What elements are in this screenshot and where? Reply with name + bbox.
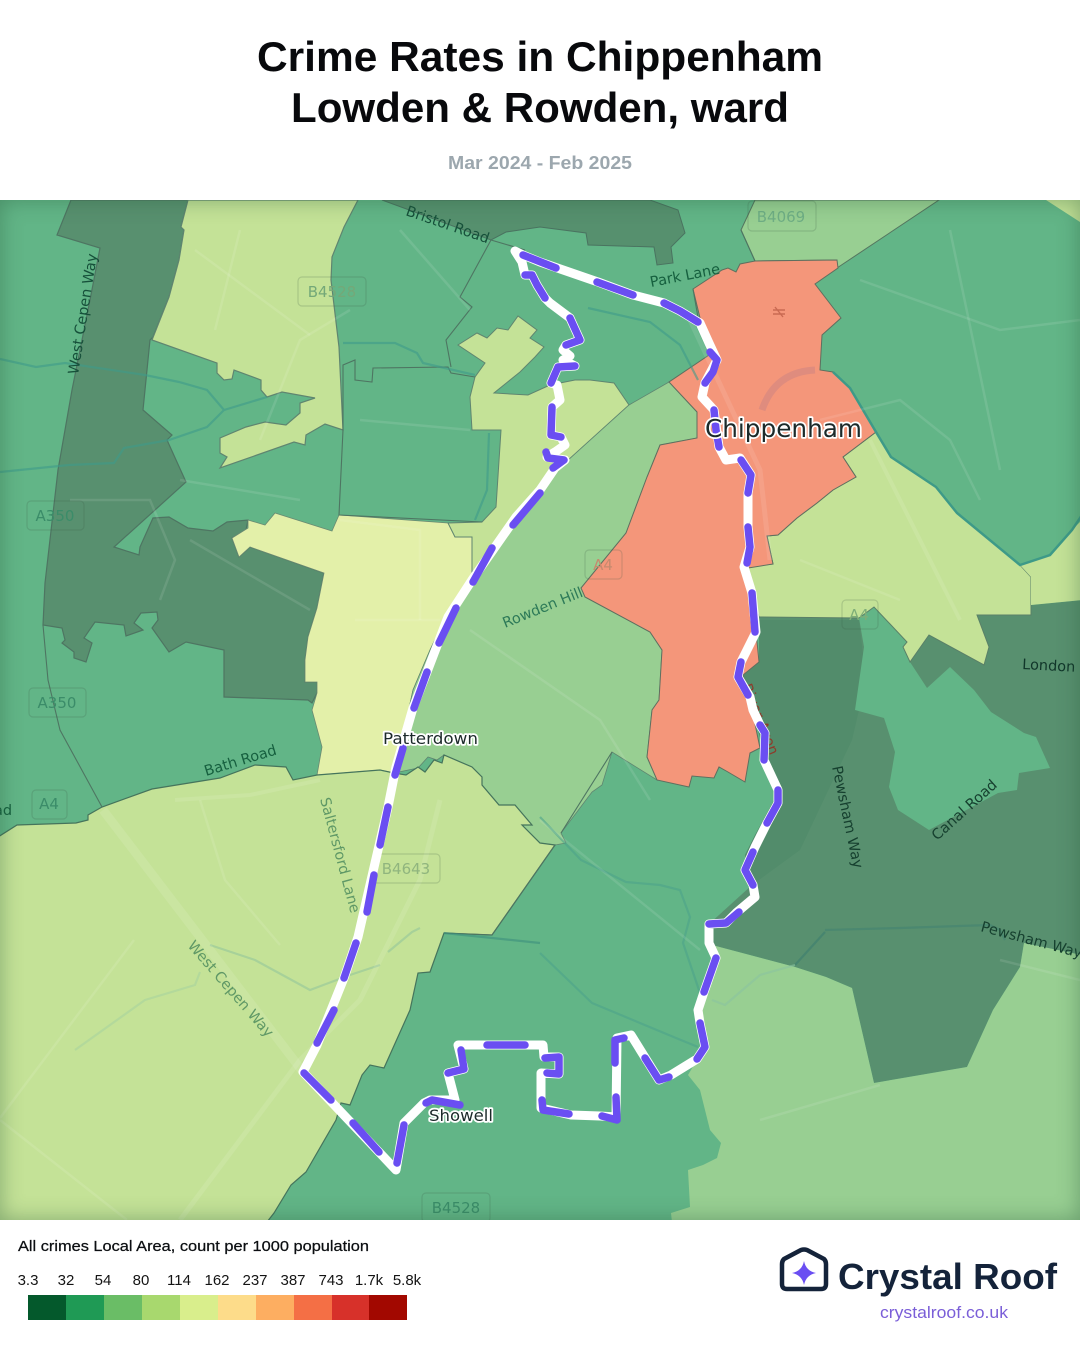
title: Crime Rates in Chippenham: [257, 33, 823, 80]
road shield: B4528 south: B4528: [432, 1199, 480, 1217]
legend value labels: 3.3: [18, 1272, 38, 1289]
road label: West Cepen Way north: West Cepen Way: [66, 252, 101, 376]
road shield: B4069: [748, 201, 816, 231]
legend value labels: 237: [242, 1272, 268, 1289]
road shield: A350 north: [27, 501, 84, 530]
road label: Bath Road: Bath Road: [202, 743, 279, 780]
title: Lowden & Rowden, ward: [291, 84, 789, 131]
area borders on medium green: [43, 230, 755, 935]
road label: London: London: [1022, 657, 1076, 676]
legend value labels: [18, 1272, 422, 1289]
legend value labels: 80: [133, 1272, 149, 1289]
road shield: B4069: B4069: [757, 208, 805, 226]
legend title: All crimes Local Area, count per 1000 population: [18, 1238, 369, 1255]
icon: house with star: [782, 1250, 826, 1289]
legend value labels: 114: [167, 1272, 191, 1289]
area: Canal Road medium green: [855, 607, 1050, 830]
road label: Park Lane: Park Lane: [649, 262, 722, 291]
area: north-west yellow-green: [152, 200, 358, 468]
road label: river text hidden beneath the ward boundary: River Avon: [738, 682, 781, 757]
road label: West Cepen Way south: West Cepen Way: [184, 938, 276, 1041]
area: north-east mid green: [741, 200, 939, 268]
road label: Rowden Hill: Rowden Hill: [501, 585, 585, 632]
place label: Chippenham: Chippenham: [705, 414, 862, 443]
area: east dark district: [708, 600, 1080, 1083]
area: Chippenham town centre salmon: [581, 260, 876, 787]
road shield: A4 centre: A4: [593, 556, 613, 574]
road shield: A4 east: A4: [849, 606, 869, 624]
road shield: A4 west: [32, 790, 67, 819]
road shield: A4 centre: [585, 550, 622, 579]
road shield: B4528 north: [298, 277, 366, 306]
road shield: A350 south: A350: [38, 694, 76, 712]
road shield: A4 west: A4: [39, 795, 59, 813]
area: north dark Bristol Road: [382, 200, 685, 265]
road shield: B4643: [373, 854, 440, 883]
ward boundary white line: [303, 251, 778, 1170]
area: south-east mid green: [671, 943, 1080, 1222]
road label: Canal Road: Canal Road: [929, 777, 1001, 844]
road shield: B4643: B4643: [382, 860, 430, 878]
road shield: B4528 north: B4528: [308, 283, 356, 301]
legend value labels: 5.8k: [393, 1272, 422, 1289]
area: east yellow-green: [743, 432, 1031, 665]
road shield: B4528 south: [422, 1193, 490, 1222]
legend: [18, 1238, 422, 1320]
logo url: crystalroof.co.uk: [880, 1304, 1009, 1322]
area: far-east yellow-green patch: [1020, 520, 1080, 605]
panel: choropleth map: [0, 200, 1080, 1222]
legend value labels: 387: [280, 1272, 306, 1289]
legend value labels: 32: [58, 1272, 74, 1289]
road shield: A350 south: [29, 688, 86, 717]
water courses: [0, 308, 1005, 1050]
road label: Saltersford Lane: Saltersford Lane: [316, 796, 362, 915]
place label: Patterdown: Patterdown: [383, 729, 478, 748]
road label: Bristol Road: Bristol Road: [404, 204, 491, 247]
river along the east boundary: [833, 372, 1080, 565]
legend value labels: 162: [204, 1272, 230, 1289]
subtitle: date range: Mar 2024 - Feb 2025: [448, 153, 632, 173]
logo: Crystal Roof: [782, 1250, 1058, 1322]
area: top-right corner: [1046, 200, 1080, 222]
logo wordmark: Crystal Roof: [838, 1256, 1058, 1297]
legend value labels: 743: [318, 1272, 344, 1289]
ward boundary purple dashes: [304, 255, 778, 1163]
river arc in town centre: [762, 370, 815, 410]
road label: Pewsham Way north: Pewsham Way: [828, 765, 865, 870]
map base area: medium green: [0, 200, 1080, 1220]
road shield: A4 east: [842, 600, 878, 629]
title: [257, 33, 823, 131]
place label: Showell: Showell: [429, 1106, 493, 1125]
railway station symbol: [773, 307, 785, 317]
legend value labels: 1.7k: [355, 1272, 384, 1289]
faint street network: [0, 230, 1080, 1220]
area: Rowden Hill mid green: [394, 382, 697, 845]
ward boundary: Lowden & Rowden: [303, 251, 778, 1170]
area: central yellow-green: [448, 316, 629, 577]
area: west dark district: [43, 200, 324, 703]
road shield: A350 north: A350: [36, 507, 74, 525]
legend colour scale: [28, 1295, 407, 1320]
area: darker strip by the river: [745, 731, 774, 856]
area: south-west yellow-green: [0, 755, 555, 1222]
area: Patterdown pale yellow: [232, 513, 472, 775]
legend value labels: 54: [95, 1272, 111, 1289]
